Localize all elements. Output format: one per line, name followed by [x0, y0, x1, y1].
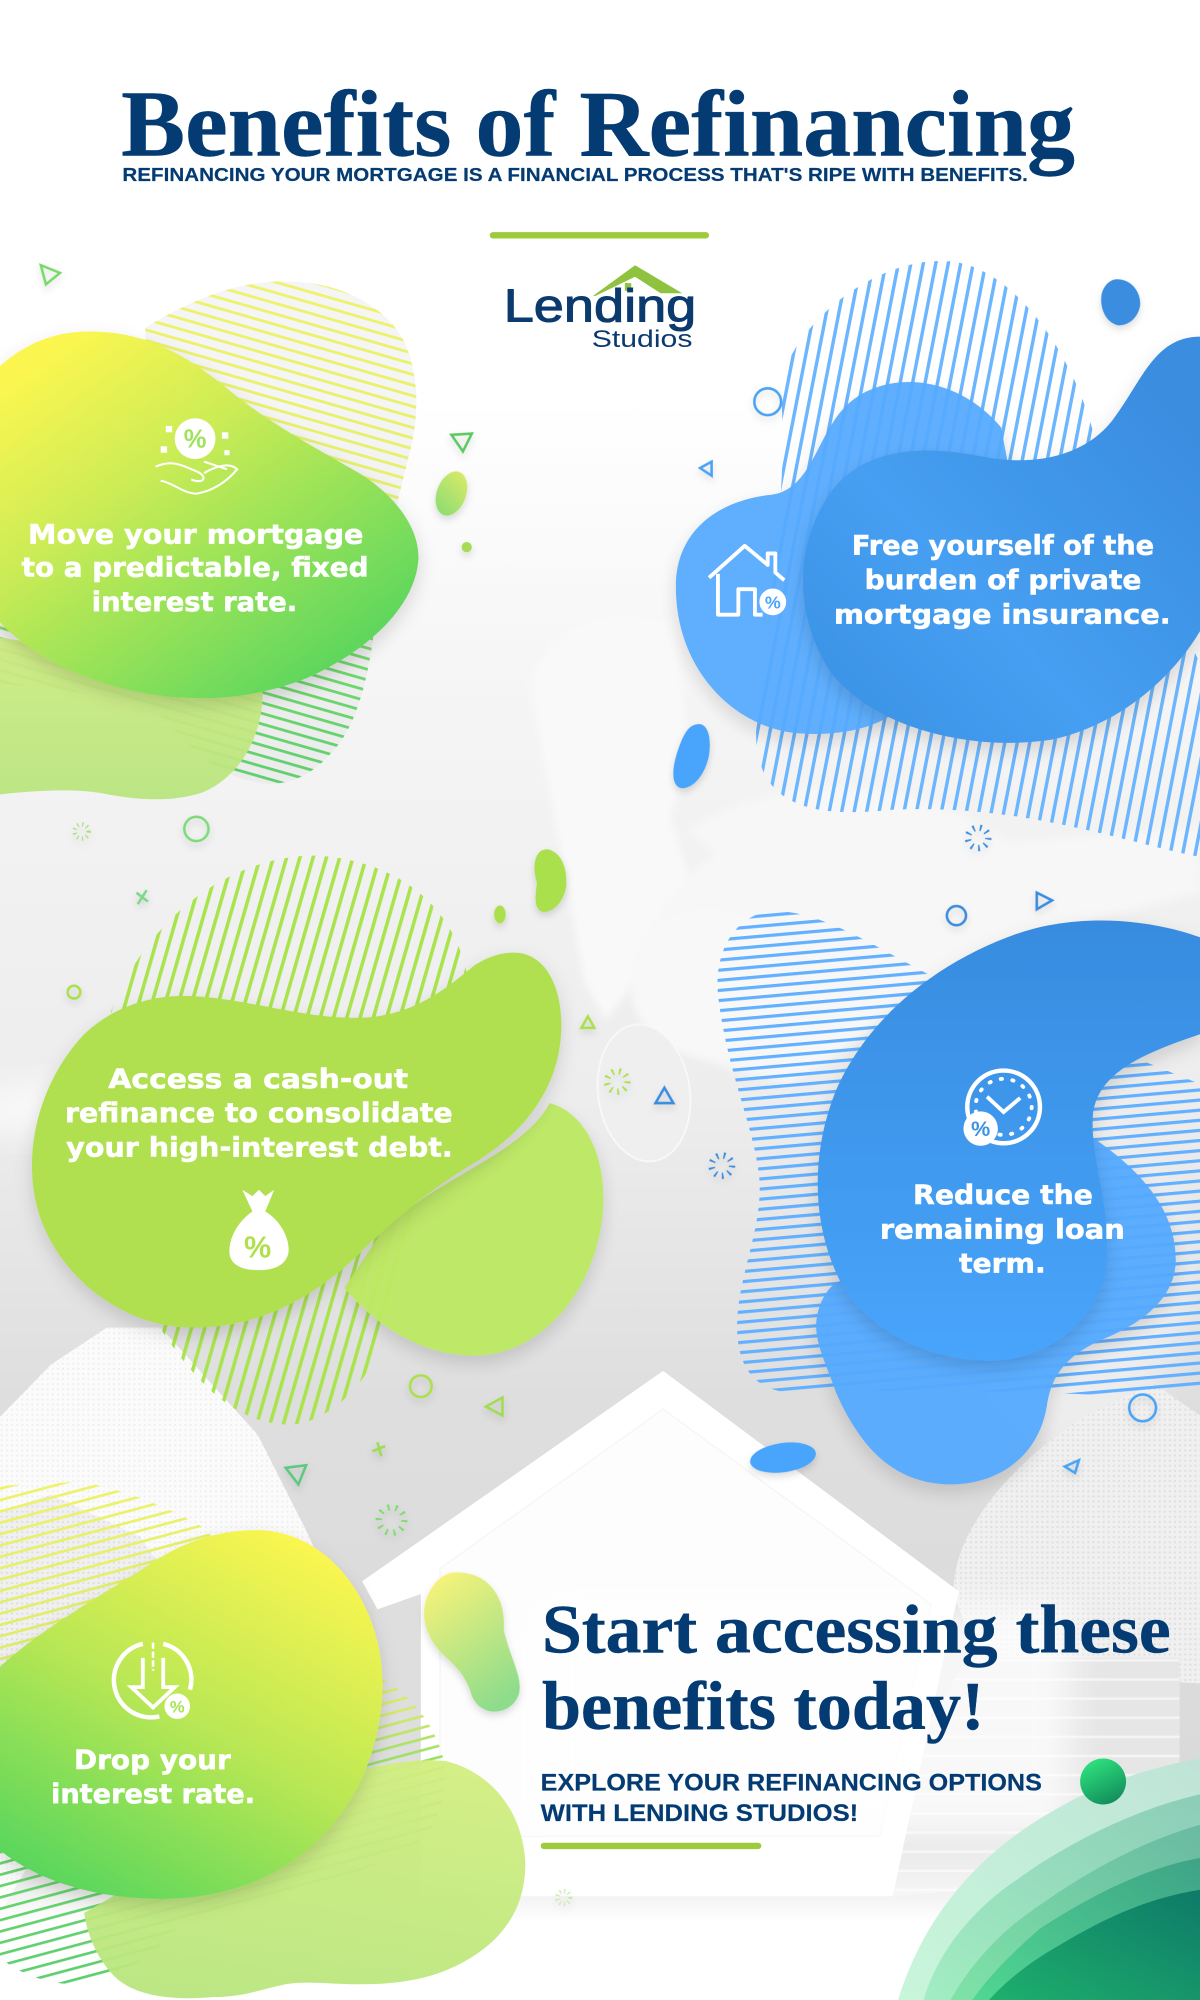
text: refinance to consolidate	[65, 1098, 453, 1129]
icon: clock with percent: %	[971, 1116, 990, 1141]
logo: Lending Studios: Lending	[504, 279, 696, 331]
icon: clock with percent	[963, 1071, 1040, 1146]
text: term.	[959, 1249, 1046, 1280]
icon: money bag with percent: %	[244, 1230, 271, 1264]
light blob	[0, 638, 263, 799]
icon: down arrow circle with percent	[114, 1643, 191, 1719]
logo: Lending Studios	[504, 265, 696, 353]
hatched blob	[0, 1467, 459, 2000]
text	[22, 519, 369, 618]
icon: hand holding percent coin	[156, 418, 237, 494]
text: interest rate.	[51, 1779, 255, 1810]
main blob	[803, 337, 1200, 743]
text: to a predictable, fixed	[22, 552, 369, 583]
text: Access a cash-out	[108, 1064, 408, 1095]
text: Move your mortgage	[28, 519, 363, 550]
call to action heading	[542, 1592, 1171, 1744]
text: your high-interest debt.	[66, 1133, 453, 1164]
panel: drop your interest rate	[0, 1467, 525, 2000]
icon: down arrow circle with percent: %	[170, 1698, 185, 1717]
light blob	[816, 1138, 1176, 1484]
text: Free yourself of the	[852, 531, 1154, 562]
main blob	[0, 331, 418, 698]
title: Benefits of Refinancing	[121, 73, 1075, 177]
main blob	[0, 1530, 383, 1899]
panel: move your mortgage	[0, 281, 424, 800]
panel: reduce loan term	[718, 911, 1200, 1484]
text: burden of private	[865, 565, 1141, 596]
text	[834, 531, 1171, 631]
hatched blob	[718, 911, 1200, 1396]
icon: house with percent: %	[765, 592, 781, 612]
text	[880, 1180, 1125, 1280]
call to action heading: Start accessing these	[542, 1592, 1171, 1668]
panel: private mortgage insurance	[676, 261, 1200, 857]
light blob	[676, 382, 1046, 734]
call to action subtext: WITH LENDING STUDIOS!	[541, 1800, 858, 1826]
icon: hand holding percent coin: %	[184, 426, 206, 454]
light blob	[344, 1103, 603, 1356]
green dot	[1080, 1759, 1126, 1804]
text	[51, 1745, 255, 1810]
subtitle: REFINANCING YOUR MORTGAGE IS A FINANCIAL PROCESS THAT'S RIPE WITH BENEFITS.	[122, 164, 1028, 185]
icon: house with percent	[709, 546, 786, 615]
text	[65, 1064, 453, 1164]
main blob	[818, 920, 1200, 1361]
text: interest rate.	[92, 587, 297, 618]
hatched blob	[111, 856, 471, 1425]
text: Reduce the	[913, 1180, 1093, 1211]
corner arcs	[898, 1759, 1200, 2000]
title underline bar	[490, 232, 709, 238]
panel: cash-out refinance	[32, 856, 603, 1425]
green decorative shapes	[41, 265, 627, 1904]
call to action subtext	[541, 1769, 1042, 1826]
icon: money bag with percent	[229, 1190, 289, 1270]
blue decorative shapes	[655, 279, 1156, 1477]
call to action underline bar	[541, 1843, 761, 1849]
text: Drop your	[74, 1745, 232, 1776]
hatched blob	[756, 261, 1200, 857]
call to action heading: benefits today!	[542, 1668, 984, 1744]
hatched blob	[0, 281, 416, 784]
call to action subtext: EXPLORE YOUR REFINANCING OPTIONS	[541, 1769, 1042, 1795]
light blob	[84, 1760, 525, 1998]
text: mortgage insurance.	[834, 600, 1171, 631]
text: remaining loan	[880, 1214, 1125, 1245]
main blob	[32, 953, 561, 1328]
logo: Lending Studios: Studios	[592, 326, 692, 353]
